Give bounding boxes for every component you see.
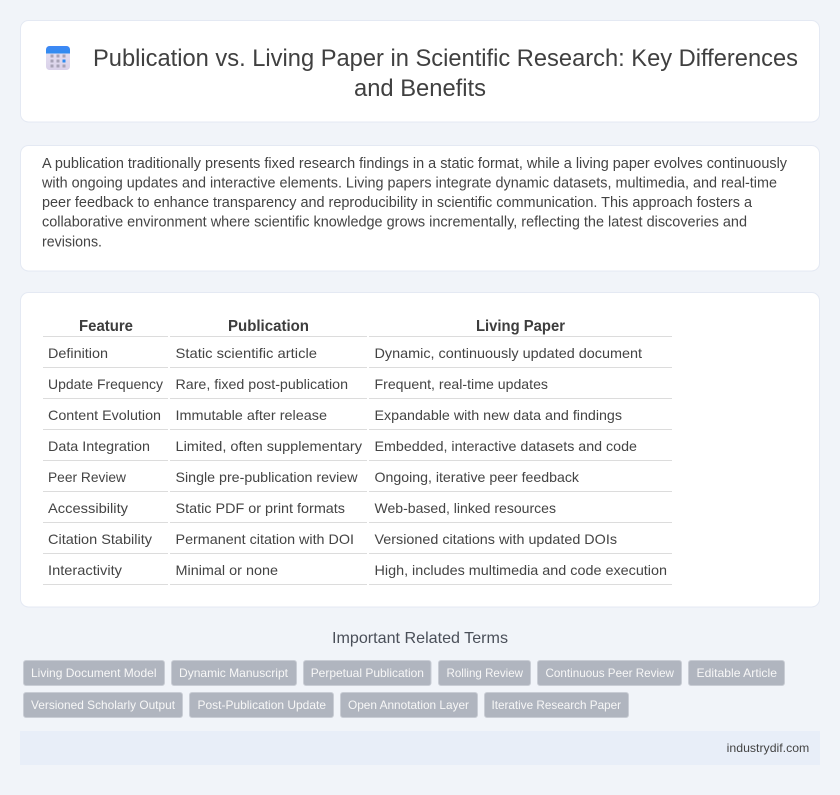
row: interactivity: Minimal or none (176, 562, 278, 578)
row: citation stability: Permanent citation with DOI (176, 531, 354, 547)
text block: introduction: peer feedback to enhance transparency and reproducibility in scientific communication. This approach fosters a (42, 195, 752, 211)
tag: Versioned Scholarly Output (31, 698, 176, 712)
tag (304, 660, 431, 686)
tag: Rolling Review (446, 666, 523, 680)
panel: comparison table (20, 292, 820, 607)
tag (190, 692, 334, 718)
title: Publication vs. Living Paper in Scientific Research: Key Differences (93, 45, 798, 72)
tag (340, 692, 478, 718)
row: definition: Static scientific article (176, 345, 317, 361)
row: content evolution: Content Evolution (48, 407, 161, 423)
text block: introduction: collaborative environment where scientific knowledge grows incrementally, reflecting the latest discoveries and (42, 214, 747, 230)
tag: Iterative Research Paper (492, 698, 621, 712)
tag: Editable Article (696, 666, 777, 680)
row: citation stability: Versioned citations with updated DOIs (374, 531, 617, 547)
tag (24, 692, 182, 718)
tag (688, 660, 784, 686)
row: data integration: Embedded, interactive datasets and code (374, 438, 637, 454)
row: accessibility: Web-based, linked resources (374, 500, 556, 516)
text block: introduction: revisions. (42, 234, 102, 250)
row: definition: Dynamic, continuously updated document (374, 345, 642, 361)
row: peer review: Ongoing, iterative peer feedback (374, 469, 580, 485)
tag (172, 660, 296, 686)
footer (20, 731, 820, 765)
row: accessibility: Static PDF or print formats (176, 500, 345, 516)
row: update frequency: Update Frequency (48, 376, 163, 392)
tag (438, 660, 530, 686)
icon: calendar (46, 46, 70, 70)
row: definition: Definition (48, 345, 108, 361)
tag: Post-Publication Update (198, 698, 326, 712)
row: data integration (43, 438, 672, 461)
tags: related terms (24, 660, 784, 718)
row: definition (43, 345, 672, 368)
heading: important related terms: Important Related Terms (332, 630, 508, 647)
tag: Open Annotation Layer (348, 698, 469, 712)
row: citation stability: Citation Stability (48, 531, 152, 547)
row: interactivity: Interactivity (48, 562, 122, 578)
table header row: Feature (79, 318, 133, 335)
row: accessibility (43, 500, 672, 523)
row: update frequency: Frequent, real-time updates (374, 376, 548, 392)
tag (538, 660, 682, 686)
text block: introduction: A publication traditionally presents fixed research findings in a static format, while a living paper evolves continuously (42, 156, 788, 172)
text block: introduction: with ongoing updates and interactive elements. Living papers integrate dynamic datasets, multimedia, and real-time (41, 176, 777, 192)
tag: Continuous Peer Review (546, 666, 674, 680)
row: citation stability (43, 531, 672, 554)
tag: Perpetual Publication (311, 666, 424, 680)
footer: industrydif.com (727, 741, 809, 755)
panel: header (20, 20, 820, 122)
text block: introduction (41, 156, 788, 250)
tag: Living Document Model (31, 666, 156, 680)
row: data integration: Limited, often supplementary (176, 438, 362, 454)
tag (24, 660, 164, 686)
row: data integration: Data Integration (48, 438, 150, 454)
row: accessibility: Accessibility (48, 500, 128, 516)
title: and Benefits (354, 75, 486, 102)
tag: Dynamic Manuscript (179, 666, 289, 680)
row: interactivity (43, 562, 672, 585)
row: update frequency: Rare, fixed post-publication (176, 376, 348, 392)
row: interactivity: High, includes multimedia and code execution (374, 562, 667, 578)
tag (484, 692, 628, 718)
title (93, 45, 798, 102)
row: content evolution (43, 407, 672, 430)
row: peer review (43, 469, 672, 492)
row: content evolution: Expandable with new data and findings (374, 407, 622, 423)
table header row: Living Paper (476, 318, 565, 335)
row: update frequency (43, 376, 672, 399)
table header row: Publication (228, 318, 309, 335)
row: content evolution: Immutable after release (176, 407, 327, 423)
row: peer review: Single pre-publication review (176, 469, 358, 485)
table header row (43, 318, 672, 337)
row: peer review: Peer Review (48, 469, 127, 485)
panel: intro text (20, 146, 820, 271)
